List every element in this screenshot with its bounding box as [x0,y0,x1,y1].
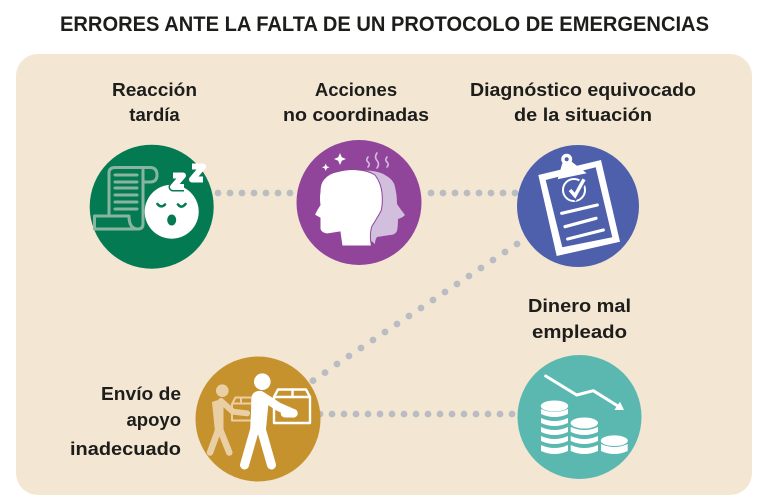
heading: Reacción tardía [112,79,197,125]
heading: Envío de apoyo inadecuado [70,383,181,459]
icon: coins and falling arrow [518,355,642,479]
icon: scroll and sleeping face [90,145,214,269]
heading: Diagnóstico equivocado de la situación: Diagnóstico equivocado [470,79,696,100]
heading: Acciones no coordinadas [283,79,429,125]
heading: Acciones no coordinadas: no coordinadas [283,104,429,125]
title: ERRORES ANTE LA FALTA DE UN PROTOCOLO DE EMERGENCIAS [60,12,709,36]
heading: Envío de apoyo inadecuado: apoyo [127,409,181,430]
heading: Reacción tardía: Reacción [112,79,197,100]
heading: Dinero mal empleado: Dinero mal [528,295,631,316]
heading: Envío de apoyo inadecuado: inadecuado [70,438,181,459]
icon: clipboard with checkmark [517,145,639,267]
icon: two heads [296,140,422,265]
heading: Acciones no coordinadas: Acciones [315,79,397,100]
heading: Dinero mal empleado [528,295,631,342]
heading: Diagnóstico equivocado de la situación [470,79,696,125]
dotted connectors [215,190,520,417]
icon: people carrying boxes [196,356,320,482]
heading: Envío de apoyo inadecuado: Envío de [101,383,181,404]
heading: Diagnóstico equivocado de la situación: de la situación [514,104,652,125]
heading: Dinero mal empleado: empleado [532,321,627,342]
heading: Reacción tardía: tardía [129,104,180,125]
